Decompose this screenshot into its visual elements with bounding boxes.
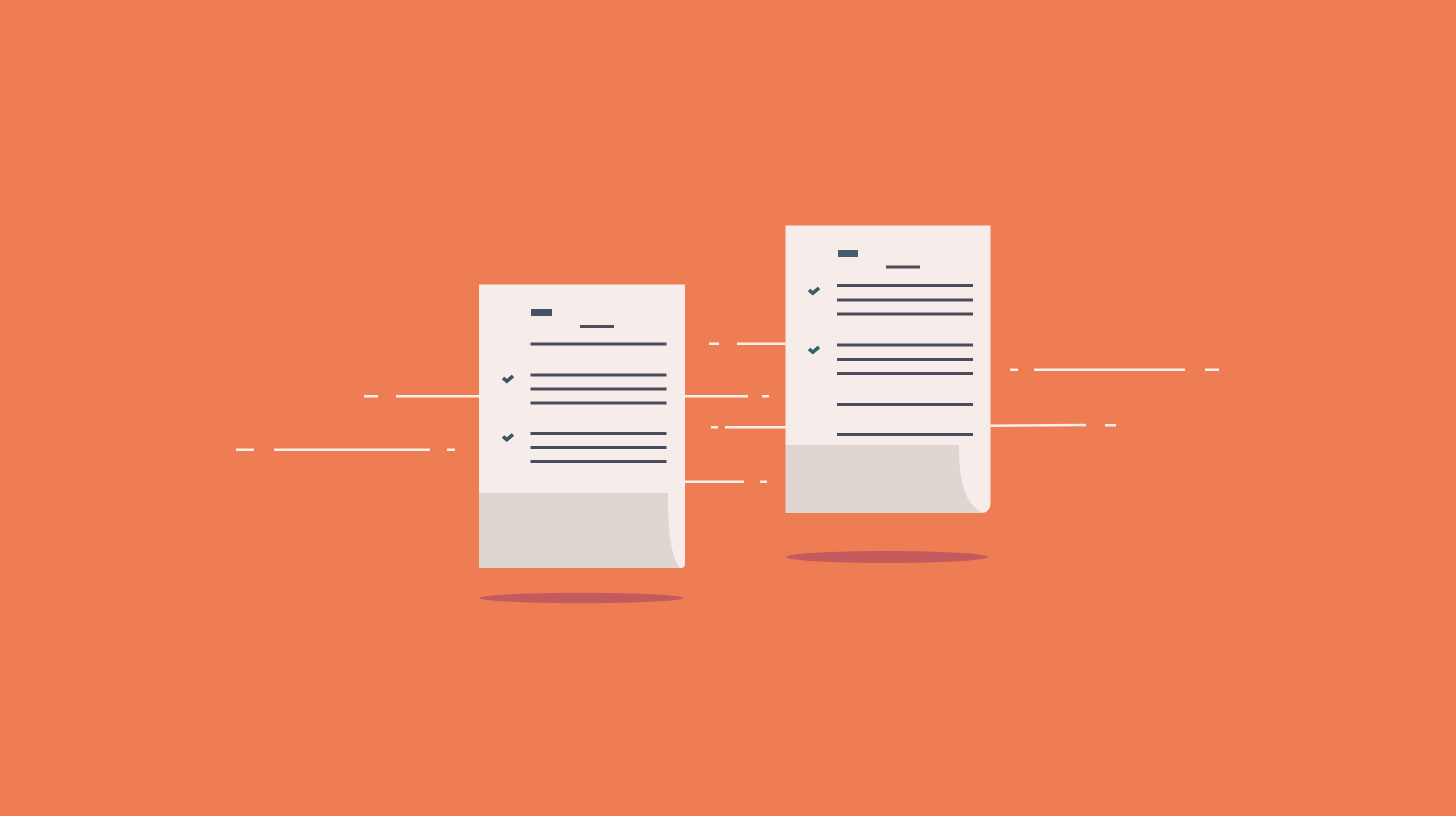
text lines	[530, 342, 666, 463]
subheading line	[886, 266, 920, 268]
icon: check mark	[809, 288, 819, 293]
motion lines: left of document one	[236, 395, 480, 451]
subheading line	[580, 325, 614, 328]
motion lines: right of document two	[990, 368, 1219, 427]
text lines	[837, 284, 973, 436]
paper sheet	[479, 284, 685, 568]
icon: check mark	[809, 347, 819, 352]
paper sheet	[786, 226, 990, 513]
heading block	[838, 250, 858, 257]
shadow under document one	[480, 593, 684, 603]
folded bottom area	[479, 493, 680, 568]
shadow under document two	[786, 551, 988, 563]
heading block	[531, 309, 552, 316]
document two	[786, 226, 990, 513]
icon: check mark	[503, 434, 513, 440]
icon: check mark	[503, 376, 513, 381]
motion lines: between the documents	[684, 342, 786, 483]
folded bottom area	[786, 445, 983, 513]
document one	[479, 284, 685, 568]
